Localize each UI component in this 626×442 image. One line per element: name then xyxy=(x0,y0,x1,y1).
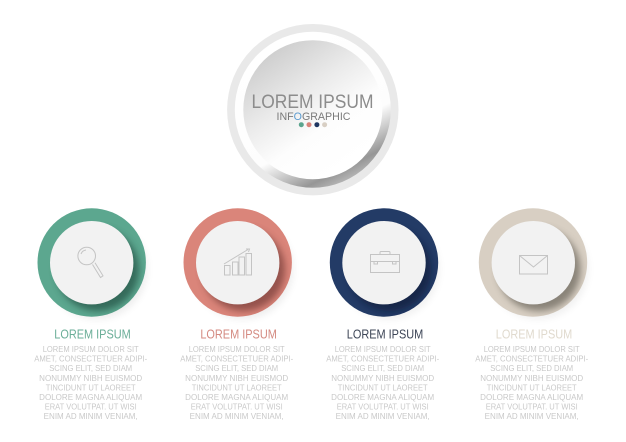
body text: TINCIDUNT UT LAOREET xyxy=(46,383,136,392)
green ring xyxy=(37,208,147,319)
body text: SCING ELIT, SED DIAM xyxy=(195,364,279,373)
heading: LOREM IPSUM xyxy=(54,328,131,342)
navy ring xyxy=(330,208,439,319)
body text: DOLORE MAGNA ALIQUAM xyxy=(480,393,584,402)
body text: AMET, CONSECTETUER ADIPI- xyxy=(475,355,589,364)
body text: TINCIDUNT UT LAOREET xyxy=(338,383,428,392)
disc xyxy=(196,221,279,304)
body text: AMET, CONSECTETUER ADIPI- xyxy=(326,355,440,364)
body text: LOREM IPSUM DOLOR SIT xyxy=(484,345,580,354)
heading: LOREM IPSUM xyxy=(496,328,572,342)
body text: DOLORE MAGNA ALIQUAM xyxy=(185,393,289,402)
body text xyxy=(180,345,294,421)
body text: ENIM AD MINIM VENIAM, xyxy=(485,412,579,421)
subtitle: INFOGRAPHIC xyxy=(276,111,351,123)
body text: NONUMMY NIBH EUISMOD xyxy=(331,374,434,383)
body text: ENIM AD MINIM VENIAM, xyxy=(190,412,284,421)
body text: TINCIDUNT UT LAOREET xyxy=(192,383,282,392)
body text: ENIM AD MINIM VENIAM, xyxy=(44,412,138,421)
disc xyxy=(342,221,426,304)
body text: LOREM IPSUM DOLOR SIT xyxy=(43,345,139,354)
body text: ERAT VOLUTPAT. UT WISI xyxy=(45,403,137,412)
body text: ERAT VOLUTPAT. UT WISI xyxy=(486,403,578,412)
red ring xyxy=(184,208,293,319)
colour dots xyxy=(299,122,327,127)
body text: NONUMMY NIBH EUISMOD xyxy=(185,374,288,383)
body text: AMET, CONSECTETUER ADIPI- xyxy=(34,355,148,364)
body text: TINCIDUNT UT LAOREET xyxy=(487,383,577,392)
body text: ERAT VOLUTPAT. UT WISI xyxy=(191,403,283,412)
panel: business xyxy=(326,208,440,421)
badge inner disc xyxy=(243,40,382,179)
body text: DOLORE MAGNA ALIQUAM xyxy=(331,393,435,402)
main title badge xyxy=(227,24,398,195)
body text: NONUMMY NIBH EUISMOD xyxy=(39,374,142,383)
disc xyxy=(492,221,575,304)
body text xyxy=(475,345,589,421)
icon: briefcase xyxy=(370,252,400,272)
body text: SCING ELIT, SED DIAM xyxy=(490,364,574,373)
badge bevel ring xyxy=(235,32,391,188)
title: LOREM IPSUM xyxy=(252,91,374,113)
body text: DOLORE MAGNA ALIQUAM xyxy=(39,393,143,402)
panel: mail xyxy=(475,208,589,421)
body text: SCING ELIT, SED DIAM xyxy=(341,364,425,373)
badge outer ring xyxy=(227,24,398,195)
body text: ENIM AD MINIM VENIAM, xyxy=(336,412,430,421)
icon: magnifying glass xyxy=(78,247,103,278)
body text: NONUMMY NIBH EUISMOD xyxy=(480,374,583,383)
body text: SCING ELIT, SED DIAM xyxy=(49,364,133,373)
body text xyxy=(326,345,440,421)
icon: envelope xyxy=(520,256,548,274)
panel: growth xyxy=(180,208,294,421)
heading: LOREM IPSUM xyxy=(200,328,277,342)
heading: LOREM IPSUM xyxy=(347,328,423,342)
body text: ERAT VOLUTPAT. UT WISI xyxy=(337,403,429,412)
icon: bar chart xyxy=(224,249,252,275)
body text: LOREM IPSUM DOLOR SIT xyxy=(189,345,285,354)
body text xyxy=(34,345,148,421)
body text: LOREM IPSUM DOLOR SIT xyxy=(335,345,431,354)
body text: AMET, CONSECTETUER ADIPI- xyxy=(180,355,294,364)
beige ring xyxy=(479,208,588,319)
panel: search xyxy=(34,208,148,421)
disc xyxy=(50,221,133,304)
